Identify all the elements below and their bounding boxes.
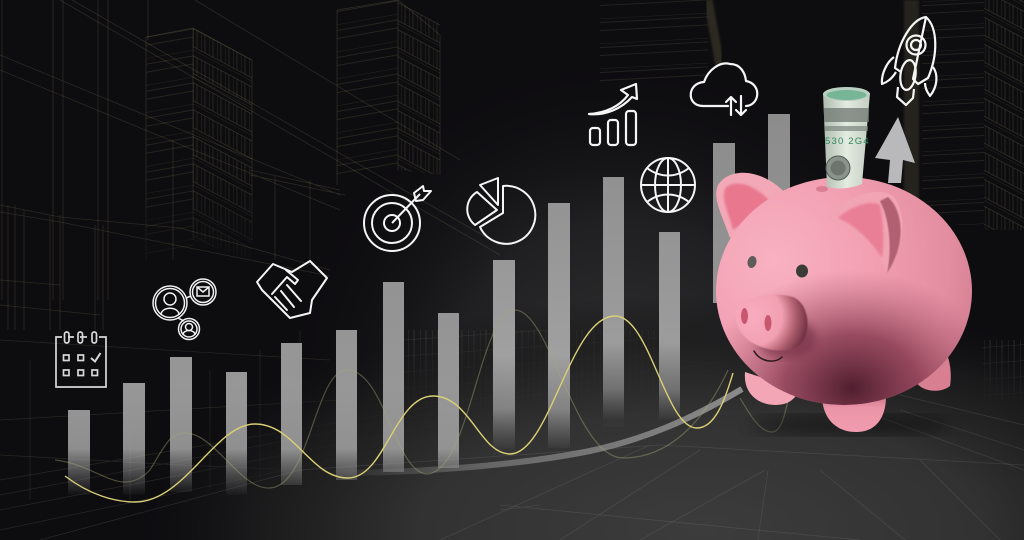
building: right bbox=[904, 0, 1024, 400]
white swoosh bbox=[330, 389, 742, 473]
left foot bbox=[745, 372, 800, 405]
bar chart bbox=[68, 114, 790, 495]
icon: target bbox=[364, 186, 431, 251]
icon: cloud sync bbox=[691, 63, 757, 115]
building: tower three bbox=[337, 0, 440, 185]
shadow bbox=[750, 415, 950, 435]
icon: calendar bbox=[56, 332, 106, 387]
icon: globe bbox=[641, 158, 695, 212]
icon: network people bbox=[153, 279, 216, 340]
right foot bbox=[915, 352, 951, 391]
body bbox=[716, 177, 972, 405]
front foot bbox=[822, 392, 886, 432]
piggy bank bbox=[716, 87, 972, 435]
snout bbox=[735, 294, 808, 351]
building: tower two bbox=[146, 28, 252, 260]
eyes bbox=[746, 255, 758, 269]
arrow bbox=[875, 117, 915, 183]
icon: rocket bbox=[882, 17, 936, 105]
snout shadow bbox=[756, 318, 816, 358]
far ear bbox=[716, 173, 790, 238]
building: left frame bbox=[0, 0, 500, 330]
smile bbox=[754, 351, 782, 361]
bill serial: 530 2G4 bbox=[825, 136, 870, 147]
icon: pie chart bbox=[467, 178, 535, 244]
yellow wave line bbox=[65, 316, 733, 502]
near ear bbox=[827, 192, 903, 273]
building: top centre bbox=[600, 0, 720, 85]
floor bbox=[0, 270, 1024, 540]
icon: growth chart bbox=[589, 84, 637, 145]
coin slot bbox=[816, 186, 828, 192]
faint wave line bbox=[55, 310, 789, 488]
icon: handshake bbox=[257, 261, 327, 318]
street wireframe bbox=[0, 330, 720, 530]
lower windows grid bbox=[400, 330, 660, 405]
money roll bbox=[823, 87, 870, 188]
